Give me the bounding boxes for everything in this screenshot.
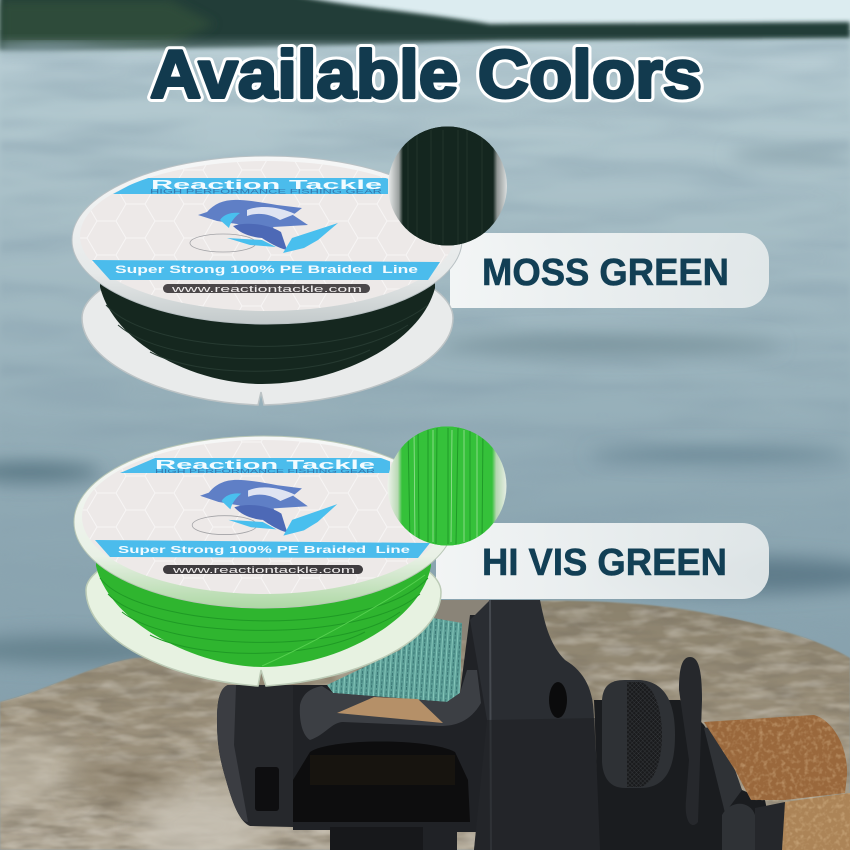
spool top disc — [74, 436, 454, 608]
moss green line — [100, 260, 435, 384]
reel: side plate — [470, 600, 602, 850]
reel: cork badge — [337, 697, 443, 723]
lower blue band — [95, 540, 430, 558]
tagline text: HIGH PERFORMANCE FISHING GEAR — [150, 190, 383, 196]
slogan text: Super Strong 100% PE Braided Line — [115, 264, 418, 276]
reel: teal spool line — [327, 618, 462, 702]
spool: hi vis green — [74, 436, 454, 686]
title: Available Colors — [150, 36, 702, 112]
reel: handle knobs — [722, 804, 755, 850]
fishing reel — [217, 600, 787, 850]
reel: grill recess — [293, 742, 470, 822]
spool bottom disc — [86, 530, 441, 686]
fish logo — [192, 480, 337, 536]
reel: frame behind line — [425, 600, 490, 640]
spool label — [82, 440, 446, 594]
swatch circle: hi vis green close-up — [387, 426, 507, 546]
spool: moss green — [72, 156, 462, 405]
reel: left plate — [217, 685, 293, 827]
label pill: moss green — [450, 233, 769, 308]
reel: handle arm — [704, 726, 742, 813]
title outline: Available Colors — [150, 36, 702, 112]
label text: moss green: MOSS GREEN — [482, 252, 729, 294]
slogan text: Super Strong 100% PE Braided Line — [118, 544, 410, 556]
cork: upper grip — [704, 715, 847, 800]
top blue band — [113, 178, 388, 194]
label pill: hi vis green — [436, 523, 769, 599]
website pill — [163, 565, 363, 574]
reel: hub — [594, 700, 775, 850]
website pill — [163, 284, 370, 293]
spool bottom disc — [82, 250, 453, 405]
reel: centre housing — [293, 615, 490, 850]
tagline text: HIGH PERFORMANCE FISHING GEAR — [155, 469, 375, 475]
brand text: Reaction Tackle — [151, 177, 382, 192]
swatch circle: moss green close-up — [388, 126, 508, 246]
label text: hi vis green: HI VIS GREEN — [482, 542, 727, 584]
wooden dock — [0, 590, 850, 850]
spool top disc — [72, 156, 462, 324]
cork: lower grip — [782, 793, 850, 850]
fish logo — [190, 200, 338, 253]
top blue band — [120, 458, 390, 473]
reel: drag dial — [602, 680, 675, 788]
spool label — [80, 161, 454, 311]
website text: www.reactiontackle.com — [170, 284, 362, 295]
reel: handle lever — [679, 657, 702, 825]
reel: knurled knob — [627, 682, 662, 787]
website text: www.reactiontackle.com — [171, 565, 355, 576]
reel: side port — [549, 682, 567, 718]
lower blue band — [92, 260, 440, 280]
hi vis green line — [96, 540, 431, 667]
reel: left plate latch — [255, 767, 279, 811]
reel: window brow — [300, 670, 481, 740]
brand text: Reaction Tackle — [155, 457, 375, 472]
cork grips — [700, 710, 850, 850]
reel: stand — [330, 827, 423, 850]
